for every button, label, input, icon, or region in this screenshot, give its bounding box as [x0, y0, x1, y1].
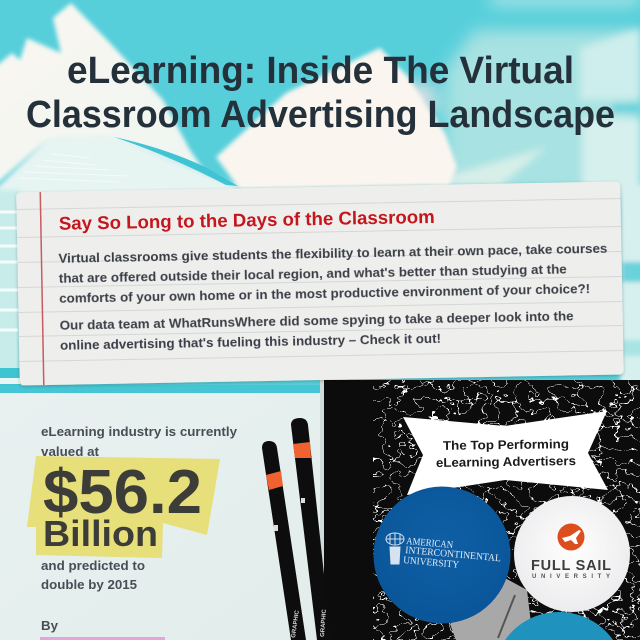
title: eLearning: Inside The Virtual	[67, 50, 574, 92]
illustration: metal clip between badges	[450, 578, 533, 640]
badge: American InterContinental University: INTERCONTINENTAL	[405, 545, 501, 564]
intro text: valued at	[41, 444, 100, 459]
prediction text: and predicted to	[41, 558, 145, 573]
banner: top performing advertisers: The Top Performing	[443, 437, 569, 453]
panel: composition notebook	[320, 380, 640, 640]
intro text: eLearning industry is currently	[41, 424, 238, 439]
note body text: Virtual classrooms give students the flexibility to learn at their own pace, take courses	[58, 242, 608, 266]
prediction text: double by 2015	[41, 577, 137, 592]
badge: American InterContinental University: UNIVERSITY	[403, 555, 459, 571]
icon: globe on column	[386, 533, 404, 564]
background: open book photo on teal	[0, 0, 640, 395]
badge: American InterContinental University: AMERICAN	[406, 536, 454, 551]
prediction text	[41, 558, 145, 633]
banner: top performing advertisers: eLearning Advertisers	[436, 454, 576, 470]
icon: orange plane logo	[558, 524, 584, 550]
badge: Full Sail University: FULL SAIL	[531, 558, 611, 574]
icon: pencil left	[262, 441, 306, 640]
badge: teal partial	[505, 612, 613, 640]
banner: top performing advertisers	[403, 411, 608, 495]
note body text: comforts of your own home or in the most productive environment of your choice?!	[59, 282, 590, 306]
panel: ruled paper note	[16, 181, 624, 386]
intro text	[41, 424, 238, 459]
title: Classroom Advertising Landscape	[26, 94, 615, 136]
value figure: $56.2	[43, 458, 202, 527]
badge: Full Sail University	[514, 496, 630, 612]
badge: Full Sail University: UNIVERSITY	[532, 574, 610, 580]
pink highlighter	[40, 637, 165, 640]
note body text	[58, 242, 609, 353]
callout: market value	[27, 424, 238, 640]
yellow highlighter	[27, 456, 220, 558]
prediction text: By	[41, 618, 59, 633]
note heading: Say So Long to the Days of the Classroom	[59, 206, 435, 234]
note body text: that are offered outside their local region, and what's better than studying at the	[59, 262, 567, 286]
icon: pencil right: GRAPHIC	[320, 608, 328, 637]
note body text: online advertising that's fueling this industry – Check it out!	[60, 332, 441, 353]
value unit: Billion	[43, 513, 158, 554]
panel: lower left pale background	[0, 393, 330, 640]
icon: pencil left: GRAPHIC	[291, 609, 301, 638]
note body text: Our data team at WhatRunsWhere did some spying to take a deeper look into the	[60, 309, 574, 333]
badge: American InterContinental University	[374, 486, 510, 624]
icon: pencil right	[291, 418, 331, 640]
title	[26, 50, 615, 136]
